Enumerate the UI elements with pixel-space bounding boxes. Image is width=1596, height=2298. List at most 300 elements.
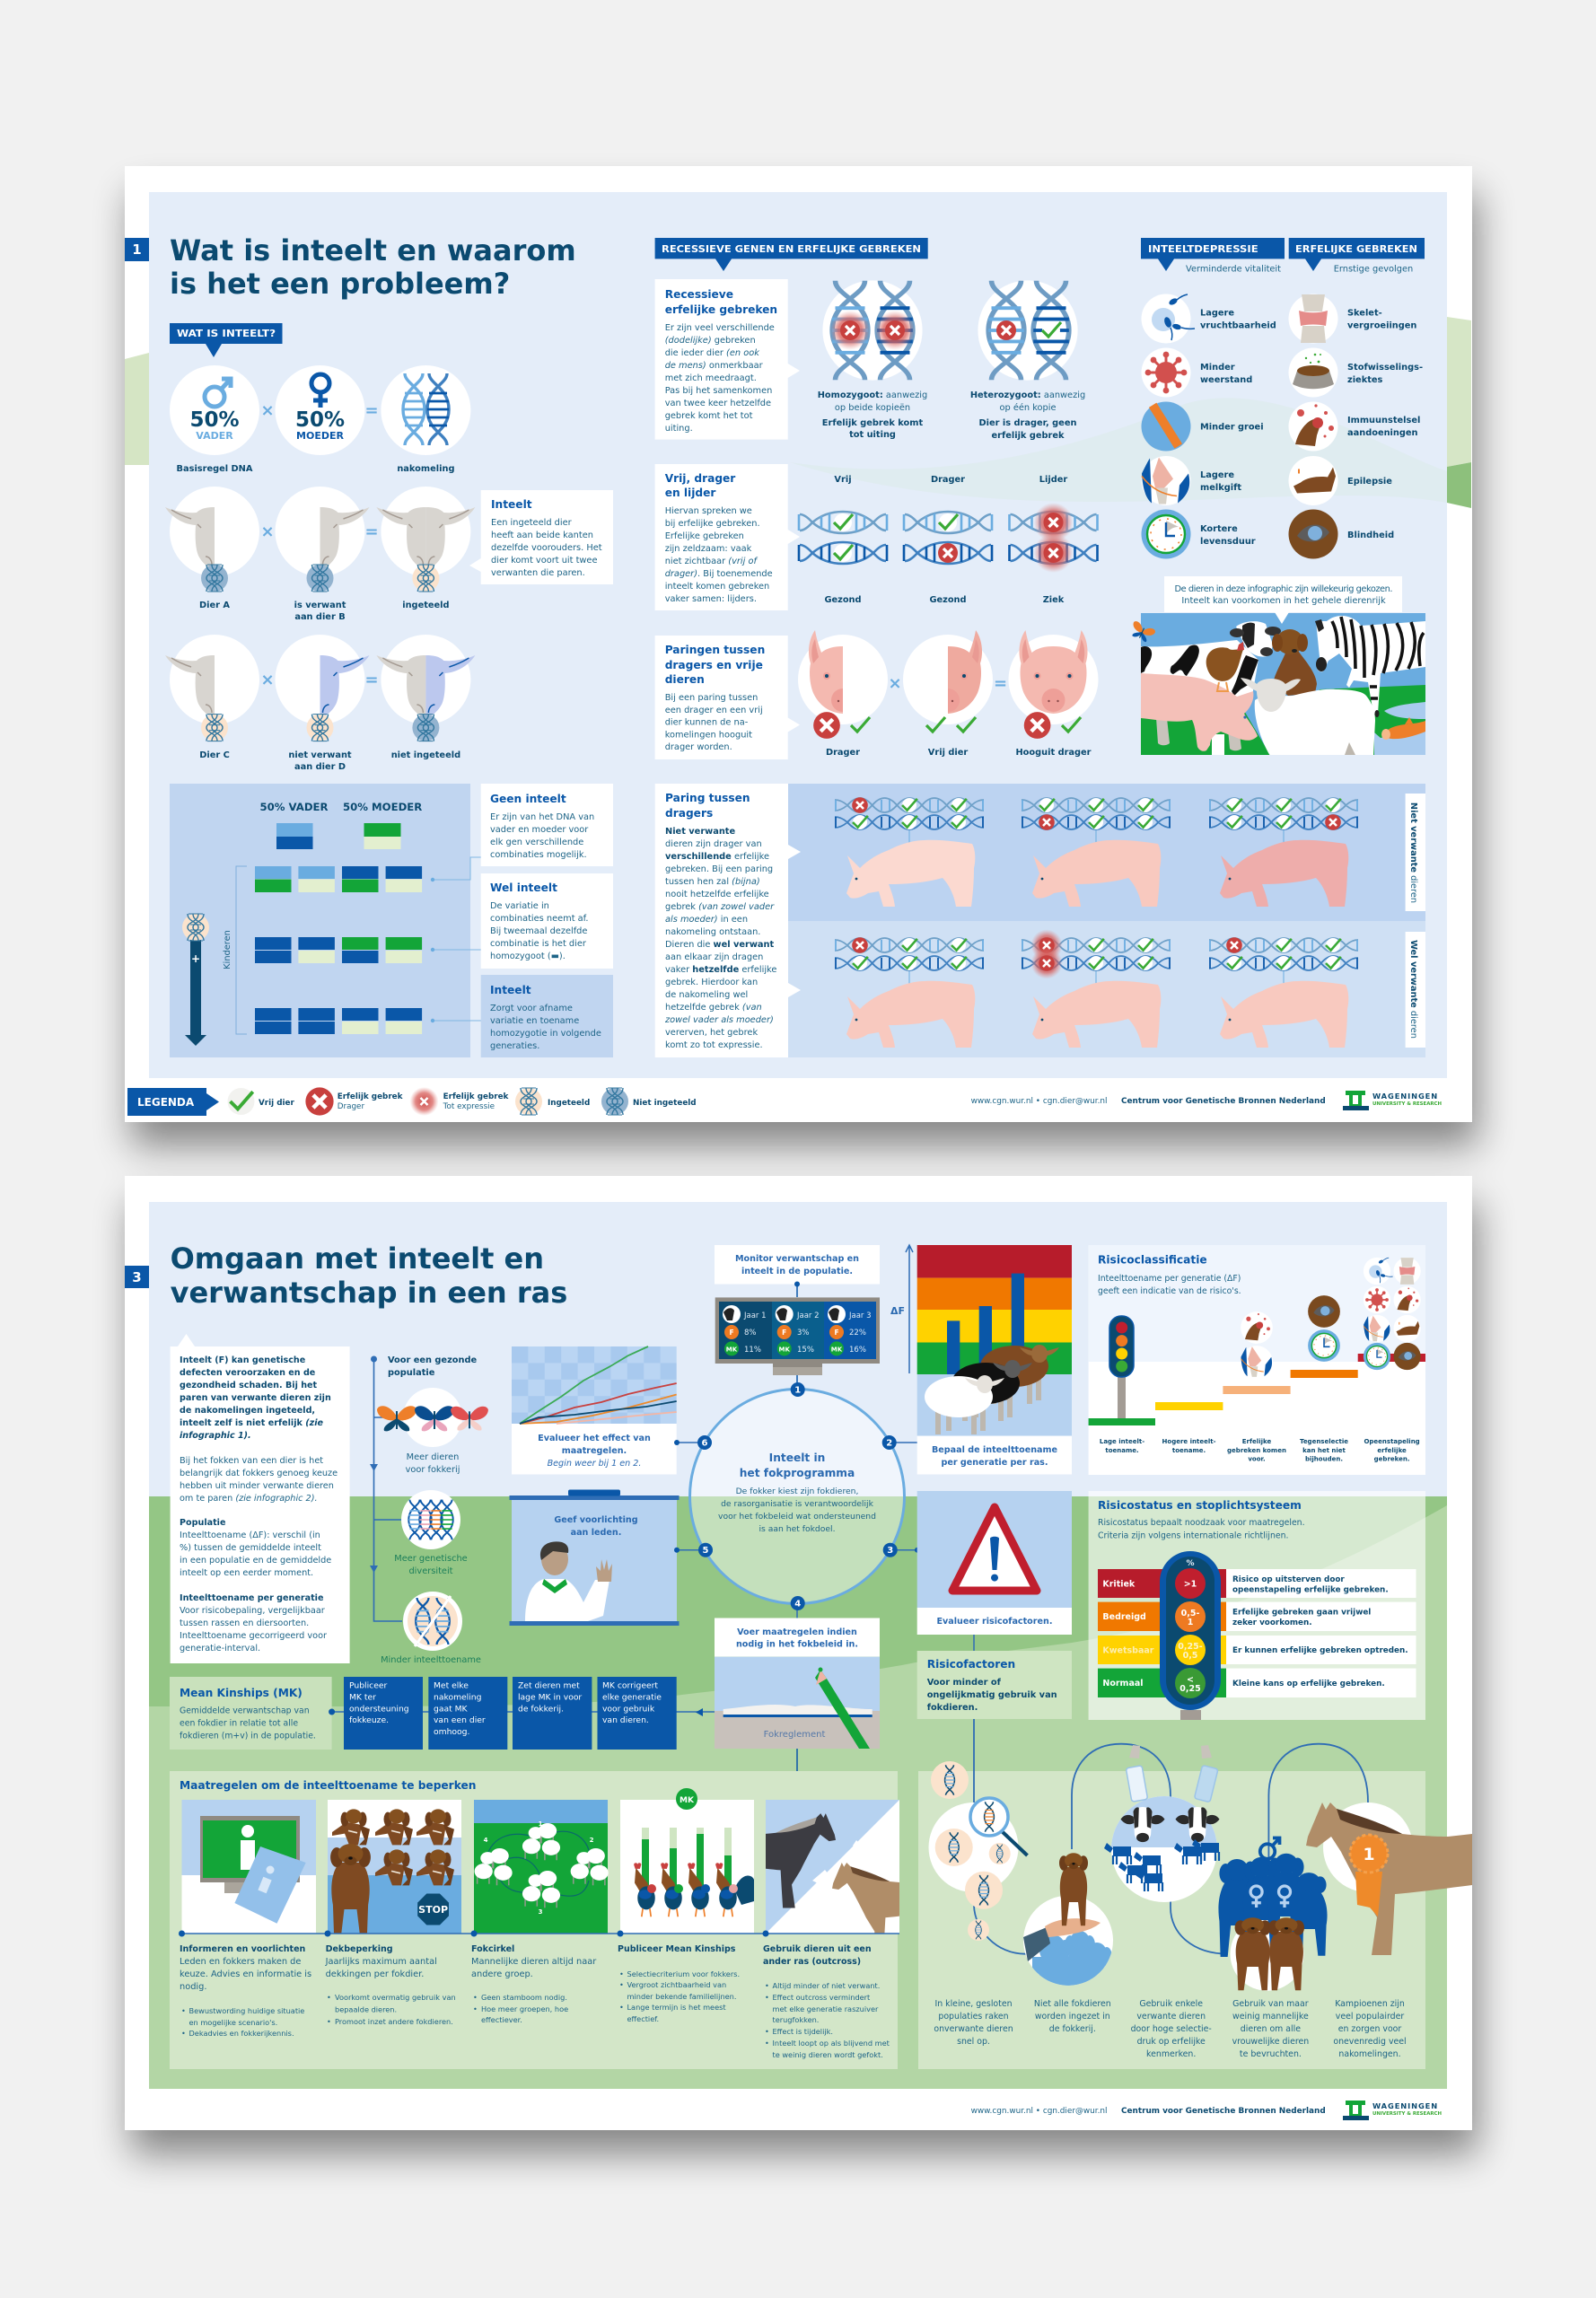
MK step boxes: Publiceer [349,1680,387,1691]
diagram: pig pairing: = [994,674,1007,693]
text box: recessieve erfelijke gebreken: gebrek komt het tot [665,411,753,421]
panel: risicoclassificatie: Risicoclassificatie [1098,1253,1207,1266]
text box: inteelt zorgt voor afname: variatie en toename [490,1016,579,1026]
panel: basisregel DNA row: MOEDER [296,430,344,442]
text box: intro: %) tussen de gemiddelde inteelt [180,1543,321,1553]
text: publiceer mean kinships: • [619,1980,624,1989]
timeline: voor een gezonde populatie: Meer dieren [407,1452,459,1462]
text: dekbeperking: Voorkomt overmatig gebruik van [335,1993,456,2002]
MK step boxes: omhoog. [434,1727,469,1737]
panel: gene combinations chart: 50% VADER [260,801,329,813]
monitor step 1: MK [779,1346,790,1353]
diagram: heterozygoot: erfelijk gebrek [991,431,1065,441]
text: outcross: Effect is tijdelijk. [772,2027,833,2036]
legend: Erfelijk gebrek [338,1092,404,1101]
animal scene [1128,613,1425,756]
text: outcross: ander ras (outcross) [763,1957,861,1967]
text box: paring tussen dragers [655,784,788,1057]
panel: inteelt sheep row: = [364,522,379,541]
panel: risicostatus en stoplichtsysteem: 0,25 [1179,1684,1201,1694]
text box: intro: inteelt zelf is niet erfelijk (zie [180,1418,323,1428]
text: informeren en voorlichten: en mogelijke scenario's. [189,2018,277,2027]
panel: risicoclassificatie: toename. [1172,1447,1206,1454]
text: fokcirkel: andere groep. [471,1969,533,1979]
captions: risk factors: verwante dieren [1136,2012,1206,2022]
callout: inteelt: Inteelt [491,498,532,511]
text box: intro: Inteelttoename (ΔF): verschil (in [180,1531,320,1540]
panel: risicostatus en stoplichtsysteem: Kwetsbaar [1102,1646,1154,1655]
text box: recessieve erfelijke gebreken: Pas bij het samenkomen [665,386,772,396]
monitor step 1: 8% [744,1329,756,1338]
text: fokcirkel [471,1944,597,2024]
text box: recessieve erfelijke gebreken: met zich meedraagt. [665,373,757,383]
icons: inteeltdepressie list: Minder [1200,363,1235,373]
text box: recessieve erfelijke gebreken [655,279,800,440]
chart: evalueer effect [512,1346,677,1474]
diagram: drager [904,475,992,605]
captions: risk factors: druk op erfelijke [1137,2037,1206,2047]
text box: inteelt zorgt voor afname: homozygotie in volgende [490,1029,601,1039]
title: Wat is inteelt en waarom [170,233,576,268]
image: fokcirkel: 4 [484,1837,488,1844]
panel: basisregel DNA row: × [260,401,275,420]
panel: risicostatus en stoplichtsysteem: Risicostatus bepaalt noodzaak voor maatregelen. [1098,1518,1305,1528]
monitor step 1: Jaar 1 [743,1311,767,1320]
chart: bepaal de inteelttoename: ΔF [890,1305,905,1317]
panel: risicostatus en stoplichtsysteem: 0,5- [1181,1609,1199,1618]
text box: intro: Inteelttoename gecorrigeerd voor [180,1631,327,1641]
connector: MK row [329,1708,715,1716]
panel: risicoclassificatie: Inteelttoename per generatie (ΔF) [1098,1274,1241,1284]
text: dekbeperking: bepaalde dieren. [335,2005,397,2014]
text box: mean kinships: Gemiddelde verwantschap van [180,1706,310,1716]
timeline: voor een gezonde populatie: diversiteit [408,1566,453,1576]
tag: erfelijke gebreken: Ernstige gevolgen [1334,265,1413,275]
panel: risicoclassificatie [1089,1245,1425,1475]
monitor step 1: 3% [797,1329,810,1338]
chart: bepaal de inteelttoename [890,1245,1072,1474]
captions: risk factors [934,1999,1407,2059]
legend [127,1087,697,1116]
callout: inteelt: heeft aan beide kanten [491,531,593,540]
panel: inteelt sheep row: Dier A [199,601,230,610]
text box: vrij, drager en lijder: niet zichtbaar (vrij of [665,557,757,566]
text box: paringen tussen dragers en vrije dieren: Bij een paring tussen [665,693,758,703]
legend: LEGENDA [137,1096,195,1109]
MK step boxes: Met elke [434,1680,469,1691]
text box: paringen tussen dragers en vrije dieren: komelingen hooguit [665,730,752,740]
text: informeren en voorlichten: Informeren en voorlichten [180,1944,306,1954]
infographic 3 card [125,1176,1472,2130]
text: outcross: Gebruik dieren uit een [763,1944,872,1954]
text box: paringen tussen dragers en vrije dieren: dier kunnen de na- [665,718,749,728]
panel: inteelt sheep row: is verwant [294,601,346,610]
footer with logo: UNIVERSITY & RESEARCH [1372,2111,1442,2117]
panel: geef voorlichting: Geef voorlichting [554,1515,638,1525]
icons: erfelijke gebreken list: Stofwisselings- [1347,363,1423,373]
diagram: pig pairing [798,630,1099,758]
text box: geen inteelt: vader en moeder voor [490,825,589,835]
text box: risicofactoren: fokdieren. [927,1703,978,1713]
cycle: inteelt in het fokprogramma: 1 [794,1386,801,1395]
chart: evalueer effect: Begin weer bij 1 en 2. [548,1459,641,1469]
cycle: inteelt in het fokprogramma: 6 [702,1438,708,1449]
captions: risk factors: Gebruik van maar [1232,1999,1309,2009]
diagram: vrij [799,475,887,605]
text: publiceer mean kinships: Lange termijn is het meest [627,2003,726,2012]
monitor step 1: inteelt in de populatie. [741,1267,853,1276]
text box: paring tussen dragers: zowel vader als moeder) [664,1015,774,1025]
legend: Tot expressie [443,1102,495,1111]
text box: recessieve erfelijke gebreken: Er zijn veel verschillende [665,323,775,333]
section number badge 3 [125,1266,149,1288]
text box: paringen tussen dragers en vrije dieren: dragers en vrije [665,659,763,671]
cycle: inteelt in het fokprogramma: Inteelt in [769,1452,825,1464]
title: Omgaan met inteelt en [171,1241,544,1276]
card shadows [131,193,1478,2154]
monitor step 1: 22% [849,1329,866,1338]
text box: wel inteelt: homozygoot (▬). [490,952,566,961]
captions: risk factors: door hoge selectie- [1131,2024,1212,2034]
text box: recessieve erfelijke gebreken: Recessieve [665,288,733,301]
image: informeren en voorlichten [181,1800,316,1934]
text box: risicofactoren: Voor minder of [927,1678,1002,1688]
title: is het een probleem? [170,267,510,301]
section number badge 1: 1 [132,241,142,258]
text box: intro: belangrijk dat fokkers genoeg keuze [180,1469,338,1478]
panel: gene combinations chart: Kinderen [223,930,232,969]
diagram: homozygoot [818,280,927,440]
image: outcross horses [766,1800,899,1934]
legend: Drager [338,1102,364,1111]
footer with logo [971,2101,1442,2120]
panel: inteelt sheep row: ingeteeld [402,601,450,610]
panel: niet ingeteeld sheep row: Dier C [199,750,230,760]
text box: vrij, drager en lijder: Hiervan spreken we [665,506,752,516]
panel: risicoclassificatie: gebreken. [1374,1456,1410,1463]
diagram: homozygoot: Homozygoot: aanwezig [818,390,927,400]
section number badge 3: 3 [132,1269,142,1285]
text box: risicofactoren: ongelijkmatig gebruik van [927,1690,1057,1700]
panel: risicostatus en stoplichtsysteem: 0,25- [1178,1642,1203,1652]
timeline: voor een gezonde populatie: populatie [388,1368,435,1378]
diagram: heterozygoot [970,280,1085,441]
text box: wel inteelt: De variatie in [490,901,549,911]
cycle: inteelt in het fokprogramma: 4 [794,1600,801,1609]
footer with logo: www.cgn.wur.nl • cgn.dier@wur.nl [971,1097,1108,1106]
footer with logo: Centrum voor Genetische Bronnen Nederland [1121,1097,1326,1106]
captions: risk factors: Niet alle fokdieren [1034,1999,1111,2009]
text box: intro: Inteelttoename per generatie [180,1593,324,1603]
text: publiceer mean kinships: minder bekende familielijnen. [627,1992,736,2001]
timeline: voor een gezonde populatie: Voor een gezonde [388,1355,478,1365]
text: fokcirkel: effectiever. [481,2015,522,2024]
text: dekbeperking: Jaarlijks maximum aantal [325,1957,437,1967]
panel: risicostatus en stoplichtsysteem: < [1187,1675,1194,1685]
panel: risicostatus en stoplichtsysteem: Normaal [1102,1679,1144,1688]
illustration: cows and calves [1104,1745,1220,1902]
panel: risicoclassificatie: Hogere inteelt- [1162,1438,1216,1445]
captions: risk factors: vrouwelijke dieren [1232,2037,1309,2047]
diagram: homozygoot: tot uiting [849,430,896,440]
chart: evalueer effect: Evalueer het effect van [538,1434,651,1443]
icons: erfelijke gebreken list: aandoeningen [1347,428,1418,438]
panel: risicostatus en stoplichtsysteem: Kleine kans op erfelijke gebreken. [1232,1680,1385,1688]
text box: intro: Bij het fokken van een dier is het [180,1456,323,1466]
panel: risicostatus en stoplichtsysteem: >1 [1184,1580,1197,1589]
panel: risicostatus en stoplichtsysteem: Kritiek [1102,1580,1136,1589]
text box: paring tussen dragers: aan elkaar zijn dragen [665,952,763,962]
MK step boxes: nakomeling [434,1692,481,1702]
image: fokcirkel [474,1800,609,1934]
panel: geef voorlichting [510,1490,679,1626]
text: outcross: Altijd minder of niet verwant. [772,1981,880,1990]
panel: basisregel DNA row: 50% [295,408,345,432]
legend: Niet ingeteeld [633,1099,697,1108]
text box: paring tussen dragers: als moeder) in een [665,915,748,925]
tag: inteeltdepressie [1141,238,1285,275]
text box: paring tussen dragers: dieren zijn drager van [665,839,762,849]
text box: inteelt zorgt voor afname: Zorgt voor afname [490,1004,573,1013]
panel: basisregel DNA row: Basisregel DNA [177,464,253,474]
text: publiceer mean kinships: • [619,2003,624,2012]
diagram: vrij: Vrij [834,475,852,485]
text box: intro: tussen rassen en diersoorten. [180,1618,309,1628]
footer with logo: Centrum voor Genetische Bronnen Nederland [1121,2107,1326,2116]
text box: vrij, drager en lijder: drager). Bij toenemende [665,569,773,579]
diagram: heterozygoot: op één kopie [1000,402,1056,413]
text box: recessieve erfelijke gebreken: uiting. [665,424,693,434]
panel: risicostatus en stoplichtsysteem: Erfelijke gebreken gaan vrijwel [1232,1609,1371,1618]
text: fokcirkel: Fokcirkel [471,1944,514,1954]
MK step boxes [344,1677,677,1750]
icons: erfelijke gebreken list: ziektes [1347,375,1383,385]
text box: wel inteelt [481,873,613,969]
icons: erfelijke gebreken list: Epilepsie [1347,477,1392,487]
panel: risicoclassificatie: bijhouden. [1305,1456,1343,1463]
image: publiceer mean kinships: MK [680,1796,695,1805]
panel: niet ingeteeld sheep row: niet verwant [288,750,352,760]
text box: paring tussen dragers: nooit hetzelfde erfelijke [665,890,769,899]
text box: inteelt zorgt voor afname [481,975,613,1057]
text: dekbeperking: • [327,2017,331,2026]
text: dekbeperking: dekkingen per fokdier. [326,1969,424,1979]
text box: recessieve erfelijke gebreken: die ieder dier (en ook [665,348,759,358]
tag: erfelijke gebreken [1289,238,1425,275]
captions: risk factors: In kleine, gesloten [934,1999,1013,2009]
text: outcross: terugfokken. [772,2015,819,2024]
text box: vrij, drager en lijder: zijn zeldzaam: vaak [665,544,752,554]
text: informeren en voorlichten: keuze. Advies en informatie is [180,1969,311,1979]
text: outcross: met elke generatie raszuiver [772,2004,879,2013]
text box: wel inteelt: combinaties neemt af. [490,914,589,924]
diagram: vrij: Gezond [824,595,862,605]
image: fokcirkel: 2 [590,1837,594,1844]
text: fokcirkel: • [473,2004,478,2013]
MK step boxes: ondersteuning [349,1704,409,1714]
diagram: drager: Gezond [929,595,967,605]
footer with logo [971,1091,1442,1110]
panel: niet ingeteeld sheep row: aan dier D [294,762,346,772]
panel: risicoclassificatie: voor. [1248,1456,1266,1463]
panel: geef voorlichting: aan leden. [571,1528,621,1538]
panel: voer maatregelen in (fokreglement): nodig in het fokbeleid in. [736,1640,858,1650]
panel: risicoclassificatie: Tegenselectie [1300,1438,1348,1445]
legend: Vrij dier [259,1099,295,1108]
panel: niet ingeteeld sheep row [165,635,475,772]
captions: risk factors: te bevruchten. [1240,2049,1302,2059]
captions: risk factors: de fokkerij. [1049,2024,1096,2034]
text box: paringen tussen dragers en vrije dieren [655,636,800,759]
legend: Erfelijk gebrek [443,1092,510,1101]
diagram: homozygoot: Erfelijk gebrek komt [822,418,923,428]
panel: risicostatus en stoplichtsysteem: 0,5 [1183,1651,1197,1661]
panel: inteelt sheep row [165,487,475,622]
text: outcross: • [765,2027,769,2036]
panel: risicostatus en stoplichtsysteem: Bedreigd [1102,1612,1146,1622]
MK step boxes: van een dier [434,1715,486,1725]
panel: risicostatus en stoplichtsysteem: Criteria zijn volgens internationale richtlijnen. [1098,1531,1288,1541]
text: fokcirkel: Mannelijke dieren altijd naar [471,1957,597,1967]
diagram: pig pairing: Vrij dier [928,748,968,758]
text: informeren en voorlichten: nodig. [180,1982,206,1992]
panel: risicostatus en stoplichtsysteem [1089,1491,1425,1720]
text box: intro: Inteelt (F) kan genetische [180,1355,306,1365]
footer with logo: WAGENINGEN [1372,1092,1438,1101]
panel: basisregel DNA row: = [364,401,379,420]
icons: inteeltdepressie list: weerstand [1200,375,1252,385]
icons: inteeltdepressie list [1142,294,1276,558]
image: fokcirkel: 3 [539,1908,543,1916]
panel: maatregelen om de inteelttoename te beperken [170,1771,932,2069]
illustration: few males, many females [1218,1838,1328,1991]
MK step boxes: voor gebruik [602,1704,655,1714]
icons: inteeltdepressie list: Lagere [1200,470,1234,480]
text: fokcirkel: Geen stamboom nodig. [481,1993,567,2002]
callout: inteelt [469,490,613,584]
cycle: inteelt in het fokprogramma: de rasorganisatie is verantwoordelijk [721,1499,874,1509]
MK step boxes: MK corrigeert [602,1680,658,1691]
diagram: pig pairing: Drager [826,748,860,758]
MK step boxes: lage MK in voor [518,1692,582,1702]
panel: risicostatus en stoplichtsysteem: Er kunnen erfelijke gebreken optreden. [1232,1646,1408,1655]
monitor step 1: F [834,1329,839,1337]
timeline: maatregelen [179,1930,899,1937]
illustration: champion horse: 1 [1363,1845,1375,1864]
text: informeren en voorlichten: Dekadvies en fokkerijkennis. [189,2029,294,2038]
text box: inteelt zorgt voor afname: Inteelt [490,984,531,996]
icons: inteeltdepressie list: Lagere [1200,309,1234,319]
text: informeren en voorlichten: • [181,2029,186,2038]
text box: geen inteelt: Geen inteelt [490,793,566,805]
text: publiceer mean kinships: • [619,1969,624,1978]
section number badge 1 [125,238,149,261]
text box: recessieve erfelijke gebreken: (dodelijke) gebreken [665,336,756,346]
monitor step 1: Jaar 3 [848,1311,872,1320]
monitor step 1: Monitor verwantschap en [735,1254,859,1264]
diagram: pig pairing: × [888,674,902,693]
text box: vrij, drager en lijder: inteelt komen gebreken [665,582,769,592]
text box: intro [171,1334,350,1663]
text box: mean kinships [170,1677,332,1750]
panel: risicostatus en stoplichtsysteem: opeenstapeling erfelijke gebreken. [1232,1585,1389,1594]
text: publiceer mean kinships: Publiceer Mean Kinships [618,1944,736,1954]
icons: erfelijke gebreken list: vergroeiingen [1347,321,1416,330]
illustration: selected breeding dog on hand [1023,1853,1113,1986]
text box: paringen tussen dragers en vrije dieren: dieren [665,673,705,686]
diagram: heterozygoot: Heterozygoot: aanwezig [970,390,1085,400]
illustration: champion horse [1306,1802,1472,1955]
text: publiceer mean kinships [618,1944,740,2023]
text box: intro: de nakomelingen ingeteeld, [180,1406,315,1416]
timeline: voor een gezonde populatie: voor fokkerij [406,1465,460,1475]
panel: basisregel DNA row: VADER [196,430,233,442]
text box: vrij, drager en lijder: vaker samen: lijders. [665,594,757,604]
captions: risk factors: Gebruik enkele [1139,1999,1203,2009]
panel: risicoclassificatie: toename. [1105,1447,1139,1454]
MK step boxes: gaat MK [434,1704,469,1714]
text box: vrij, drager en lijder: Erfelijke gebreken [665,531,744,541]
panel: pig offspring, not related: Niet verwante dieren [1408,803,1418,903]
cycle: inteelt in het fokprogramma: het fokprogramma [740,1467,855,1479]
captions: risk factors: veel populairder [1336,2012,1404,2022]
legend: Ingeteeld [548,1099,590,1108]
icons: erfelijke gebreken list: Skelet- [1347,309,1382,319]
panel: risicoclassificatie: gebreken komen [1227,1447,1286,1454]
cycle: inteelt in het fokprogramma: voor het fokbeleid wat ondersteunend [718,1512,876,1522]
text box: recessieve erfelijke gebreken: van twee keer hetzelfde [665,399,771,408]
tag: inteeltdepressie: Verminderde vitaliteit [1186,265,1281,275]
panel: niet ingeteeld sheep row: × [260,671,275,689]
footer with logo: UNIVERSITY & RESEARCH [1372,1101,1442,1107]
chart: evalueer effect: maatregelen. [562,1446,627,1456]
text box: vrij, drager en lijder: bij erfelijke gebreken. [665,519,760,529]
diagram: lijder: Ziek [1043,595,1065,605]
text box: paring tussen dragers: verschillende erfelijke [665,852,769,862]
captions: risk factors: nakomelingen. [1338,2049,1401,2059]
text: dekbeperking [325,1944,456,2026]
panel: risicostatus en stoplichtsysteem: 1 [1188,1618,1193,1627]
text box: intro: infographic 1). [180,1431,251,1441]
monitor step 1: 11% [744,1346,761,1355]
monitor step 1: MK [831,1346,843,1353]
panel: niet ingeteeld sheep row: niet ingeteeld [391,750,460,760]
panel: evalueer risicofactoren: Evalueer risicofactoren. [936,1617,1053,1627]
text: informeren en voorlichten: Leden en fokkers maken de [180,1957,301,1967]
icons: inteeltdepressie list: vruchtbaarheid [1200,321,1276,330]
text: informeren en voorlichten: Bewustwording huidige situatie [189,2006,304,2015]
tag: wat is inteelt [170,323,282,357]
captions: risk factors: populaties raken [938,2012,1009,2022]
infographic 1 card [125,166,1472,1122]
panel: basisregel DNA row: nakomeling [397,464,454,474]
panel: inteelt sheep row: aan dier B [294,612,346,622]
panel: risicostatus en stoplichtsysteem: % [1186,1559,1195,1568]
panel: voer maatregelen in (fokreglement): Fokreglement [764,1730,825,1740]
panel: voer maatregelen in (fokreglement): Voer maatregelen indien [737,1627,857,1637]
text box: intro: hebben uit minder verwante dieren [180,1481,334,1491]
panel: gene combinations chart [170,784,481,1057]
panel: basisregel DNA row [170,365,470,474]
callout: dieren willekeurig gekozen: Inteelt kan voorkomen in het gehele dierenrijk [1181,596,1386,606]
text box: geen inteelt: Er zijn van het DNA van [490,812,594,822]
text box: intro: gezondheid schaden. Bij het [180,1381,318,1390]
diagram: heterozygoot: Dier is drager, geen [979,418,1076,428]
panel: risicoclassificatie: Erfelijke [1242,1438,1271,1445]
monitor step 1: F [729,1329,734,1337]
text box: paring tussen dragers: nakomeling ontstaan. [665,927,760,937]
captions: risk factors: onevenredig veel [1333,2037,1407,2047]
